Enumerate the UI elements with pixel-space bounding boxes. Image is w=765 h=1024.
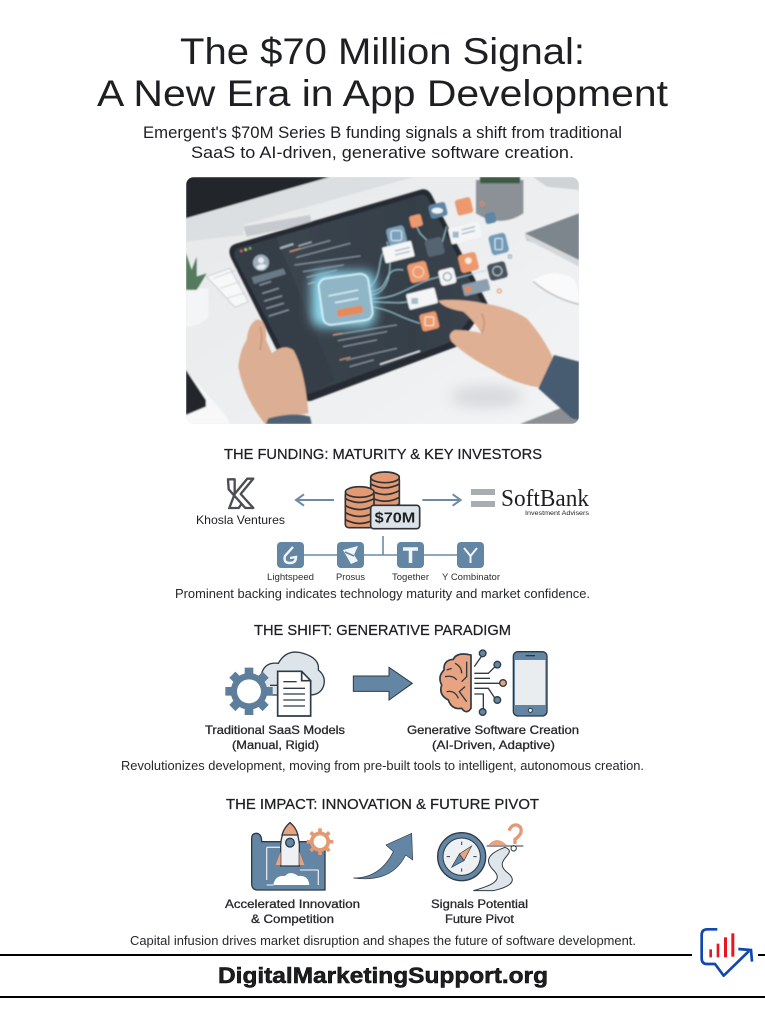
arrow right (422, 494, 461, 506)
caption: funding: Prominent backing indicates technology maturity and market confidence. (175, 587, 590, 601)
label: traditional SaaS: (Manual, Rigid) (232, 738, 319, 752)
icon: gear, cloud and document (225, 652, 324, 716)
code lines (290, 241, 397, 367)
icon: Together: Together (392, 572, 429, 583)
floating module cards (385, 225, 408, 247)
icon: Prosus: Prosus (336, 572, 365, 583)
title: A New Era in App Development (97, 73, 669, 114)
funding diagram (196, 472, 590, 583)
arrow: shift (353, 667, 412, 700)
arrow left (296, 494, 334, 506)
label: generative software: (AI-Driven, Adaptive) (432, 738, 555, 752)
section heading: funding: THE FUNDING: MATURITY & KEY INVESTORS (224, 447, 542, 463)
label: accelerated innovation: Accelerated Innovation (225, 897, 360, 911)
caption: shift: Revolutionizes development, moving from pre-built tools to intelligent, autonomous creation. (121, 759, 644, 773)
section heading: impact: THE IMPACT: INNOVATION & FUTURE PIVOT (226, 797, 539, 813)
subtitle: SaaS to AI-driven, generative software creation. (191, 144, 574, 162)
investor: Khosla Ventures: Khosla Ventures (196, 513, 285, 527)
investor: SoftBank: Investment Advisers (525, 510, 590, 517)
footer (0, 929, 765, 998)
impact diagram (225, 823, 528, 926)
icon: Y Combinator (442, 542, 500, 583)
caption: impact: Capital infusion drives market disruption and shapes the future of software development. (130, 934, 636, 948)
investor: Khosla Ventures (196, 479, 285, 527)
connector streams (370, 220, 487, 323)
investor icons row (267, 542, 500, 583)
shift diagram (205, 650, 579, 752)
icon: Y Combinator: Y Combinator (442, 572, 500, 583)
hands (238, 319, 308, 424)
icon: chart speech bubble logo (702, 929, 752, 976)
investor: SoftBank (471, 486, 590, 517)
label: future pivot: Future Pivot (445, 912, 515, 926)
arrow: upward curve (353, 833, 413, 879)
label: accelerated innovation: & Competition (251, 912, 334, 926)
investor: SoftBank: SoftBank (501, 486, 589, 512)
icon: Lightspeed: Lightspeed (267, 572, 314, 583)
connector lines (290, 536, 480, 555)
hero illustration: hands using a tablet with generated app modules (186, 177, 579, 424)
icon: Together (392, 542, 429, 583)
icon: Prosus (336, 542, 365, 583)
label: future pivot (431, 897, 528, 926)
label: future pivot: Signals Potential (431, 897, 528, 911)
icon: coin stacks with $70M badge: $70M (375, 510, 415, 527)
label: generative software: Generative Software Creation (407, 723, 579, 737)
label: accelerated innovation (225, 897, 360, 926)
title (97, 31, 669, 114)
footer: DigitalMarketingSupport.org (218, 963, 548, 988)
icon: coin stacks with $70M badge (345, 472, 420, 529)
label: traditional SaaS: Traditional SaaS Models (205, 723, 345, 737)
icon: rocket on blueprint with gear (252, 823, 333, 890)
label: generative software (407, 723, 579, 752)
tablet body (229, 189, 488, 401)
subtitle (143, 124, 622, 162)
sidebar (235, 242, 271, 318)
icon: Lightspeed (267, 542, 314, 583)
icon: brain with circuit and phone (440, 650, 547, 716)
subtitle: Emergent's $70M Series B funding signals a shift from traditional (143, 124, 622, 142)
label: traditional SaaS (205, 723, 345, 752)
title: The $70 Million Signal: (180, 31, 585, 72)
section heading: shift: THE SHIFT: GENERATIVE PARADIGM (254, 623, 511, 639)
icon: compass, winding road and question mark (438, 825, 523, 891)
